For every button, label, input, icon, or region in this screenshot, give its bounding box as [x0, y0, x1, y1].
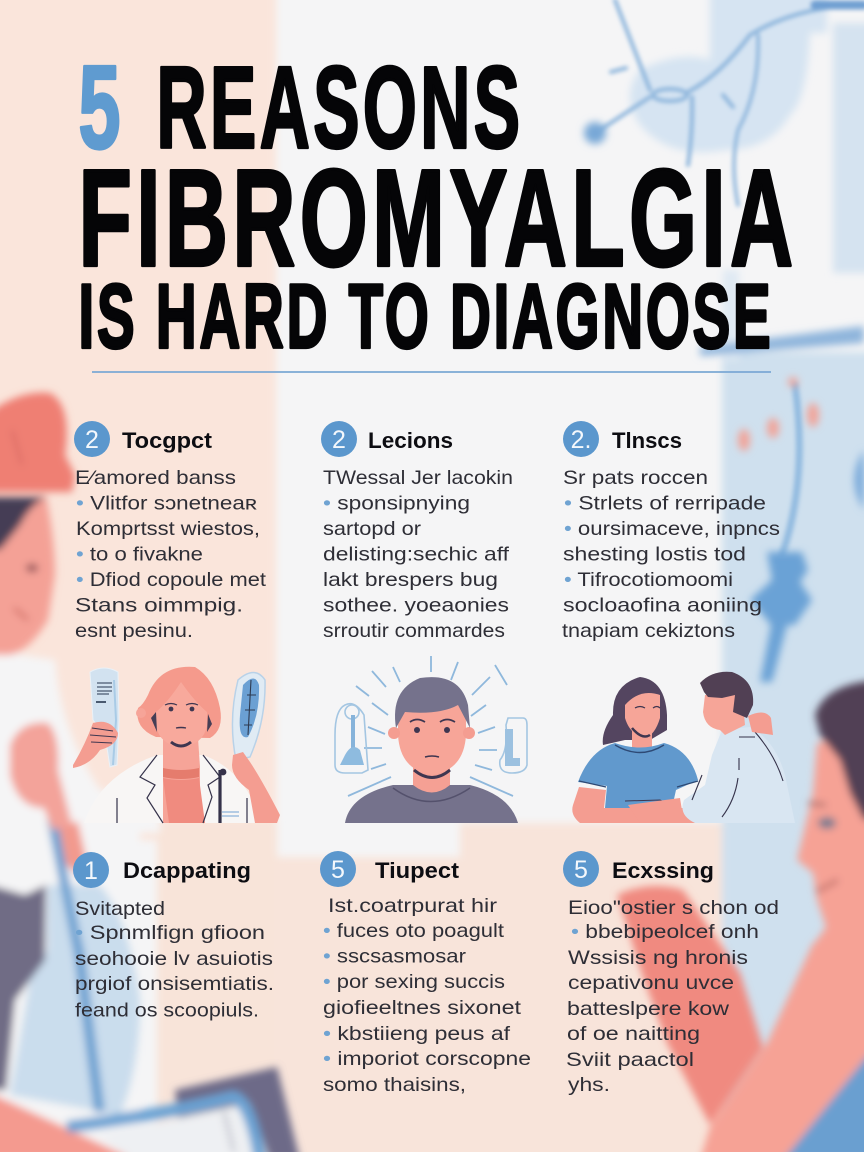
body text: batteslpere kow — [567, 998, 730, 1020]
body text — [75, 467, 267, 642]
body text: • oursimaceve, inpncs — [564, 518, 780, 540]
number badge: 2 — [85, 426, 99, 454]
left hand — [73, 722, 118, 768]
face — [398, 690, 466, 775]
body text: • to o fivakne — [76, 544, 203, 566]
man face — [703, 692, 745, 735]
right hand and arm — [232, 752, 280, 823]
body text — [562, 467, 780, 642]
body text: • bbebipeolcef onh — [571, 921, 759, 943]
body text: esnt pesinu. — [75, 620, 193, 642]
title line: 5 reasons — [78, 42, 524, 174]
body text: E⁄amored banss — [75, 467, 236, 489]
body text: • Tifrocotiomoomi — [564, 569, 733, 591]
number badge: 5 — [331, 856, 345, 884]
body text: • sscsasmosar — [323, 946, 467, 968]
shoulders — [345, 785, 518, 823]
clasped hand — [628, 798, 684, 823]
left figure — [0, 393, 300, 1152]
body text: Komprtsst wiestos, — [76, 518, 260, 540]
number badge: 2 — [332, 426, 346, 454]
body text: sothee. yoeaonies — [323, 594, 509, 616]
right thermometer — [232, 672, 265, 760]
right icon — [500, 718, 527, 773]
coat lapels — [117, 755, 247, 823]
number badge: 5 — [574, 856, 588, 884]
body text — [323, 895, 531, 1096]
title — [78, 42, 798, 368]
body text — [75, 898, 274, 1022]
body text: srroutir commardes — [323, 620, 505, 642]
body text: prgiof onsisemtiatis. — [75, 973, 274, 995]
illustration: patient and doctor talking — [572, 672, 795, 823]
heading: Lecions — [368, 428, 453, 453]
body text: somo thaisins, — [323, 1074, 466, 1096]
woman blue shirt — [578, 743, 698, 808]
body text: Ist.coatrpurat hir — [328, 895, 498, 917]
hair — [395, 677, 470, 728]
body text: feand os scoopiuls. — [75, 1000, 259, 1022]
body text: Sr pats roccen — [563, 467, 708, 489]
panel: top right — [562, 421, 780, 642]
heading: Ecxssing — [612, 858, 714, 883]
body text — [323, 467, 513, 642]
number badge — [563, 421, 599, 457]
body text: • Dfiod copoule met — [76, 569, 267, 591]
man hand on neck — [748, 712, 773, 735]
man shirt — [682, 727, 795, 823]
body text: • Vlitfor sɔnetneaʀ — [76, 492, 257, 514]
panel: top middle — [321, 421, 513, 642]
heading: Dcappating — [123, 858, 251, 883]
heading: Tlnscs — [612, 428, 682, 453]
body text: socloaofina aoniing — [563, 594, 762, 616]
body text: giofieeltnes sixonet — [323, 997, 522, 1019]
doctor hair — [137, 667, 221, 738]
neck — [413, 760, 450, 792]
body text: Sviit paactol — [566, 1049, 694, 1071]
body text: Wssisis ng hronis — [568, 947, 748, 969]
man hair — [700, 672, 753, 718]
number badge — [563, 851, 599, 887]
body text: TWessal Jer lacokin — [323, 467, 513, 489]
number badge — [321, 421, 357, 457]
heading: Tocgpct — [122, 428, 213, 453]
left icon — [335, 704, 368, 773]
body text — [566, 897, 779, 1096]
panel: bottom middle — [320, 851, 531, 1096]
body text: Svitapted — [75, 898, 165, 920]
title line: 5 reasons: 5 — [78, 42, 120, 174]
number badge — [73, 852, 109, 888]
woman neck and face — [632, 730, 652, 753]
body text: • por sexing succis — [323, 971, 505, 993]
number badge: 2. — [571, 426, 591, 454]
body text: • Spnmlfign gfioon — [75, 922, 265, 944]
clipboard — [175, 1067, 300, 1152]
body text: tnapiam cekiztons — [562, 620, 735, 642]
radiating lines — [348, 656, 513, 796]
woman arm — [572, 787, 705, 823]
doctor face — [156, 682, 207, 747]
body text: of oe naitting — [567, 1023, 700, 1045]
panel: bottom left — [73, 852, 274, 1022]
body text: Eioo"ostier s chon od — [568, 897, 779, 919]
body text: • sponsipnying — [323, 492, 470, 514]
number badge — [320, 851, 356, 887]
panel: top left — [74, 421, 267, 642]
body text: cepativonu uvce — [568, 972, 734, 994]
body text: • kbstiieng peus af — [323, 1023, 511, 1045]
body text: seohooie lv asuiotis — [75, 948, 273, 970]
panel: bottom right — [563, 851, 779, 1096]
woman hair — [603, 677, 667, 745]
body text: • Strlets of rerripade — [564, 492, 766, 514]
illustration: person with radiating pain — [335, 656, 527, 823]
doctor neck and shirt — [163, 738, 200, 823]
number badge — [74, 421, 110, 457]
left thermometer — [90, 668, 119, 767]
body text: Stans oimmpig. — [75, 594, 243, 616]
body text: • fuces oto poagult — [323, 920, 505, 942]
body text: • imporiot corscopne — [323, 1048, 531, 1070]
illustration: doctor with thermometers — [73, 667, 280, 823]
title line: 5 reasons: REASONS — [156, 42, 524, 172]
body text: sartopd or — [323, 518, 422, 540]
body text: shesting lostis tod — [563, 544, 746, 566]
right figure — [617, 680, 864, 1152]
body text: yhs. — [568, 1074, 610, 1096]
body text: lakt brespers bug — [323, 569, 498, 591]
stethoscope — [218, 770, 222, 823]
body text: delisting:sechic aff — [323, 544, 510, 566]
heading: Tiupect — [375, 858, 460, 883]
number badge: 1 — [84, 857, 98, 885]
